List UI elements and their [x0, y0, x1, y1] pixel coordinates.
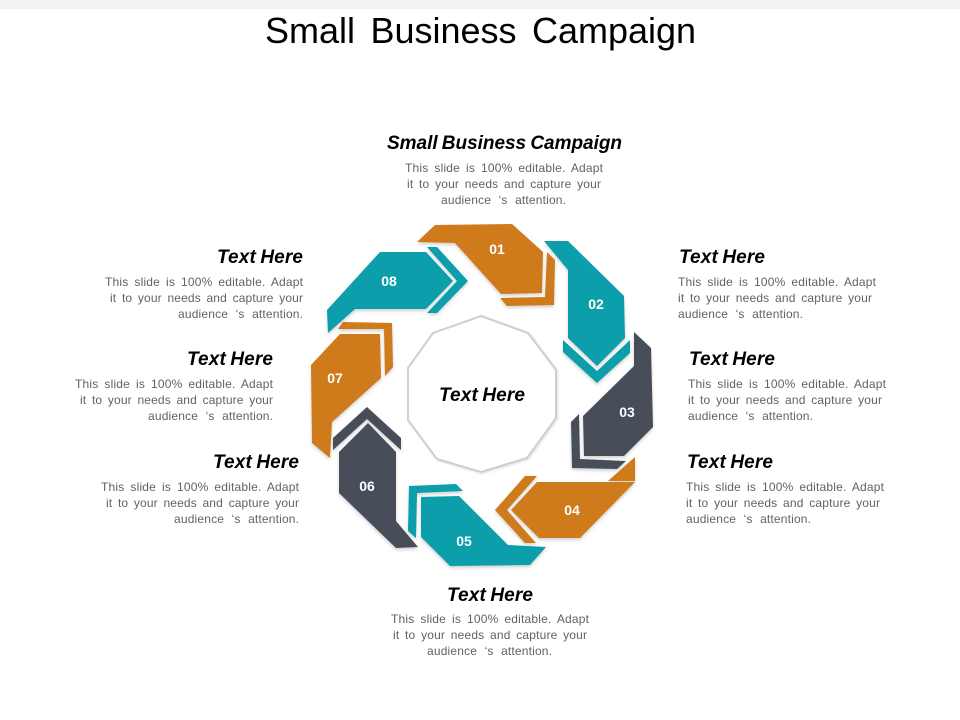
text block: top: audience ‘s attention.: [441, 193, 566, 207]
arrow segment 04: [495, 457, 635, 543]
text block: lower left: This slide is 100% editable. Adapt: [101, 480, 300, 494]
text block: bottom: This slide is 100% editable. Adapt: [391, 612, 590, 626]
text block: middle right: Text Here: [689, 349, 775, 370]
text block: upper left: Text Here: [217, 247, 303, 268]
text block: middle left: Text Here: [187, 349, 273, 370]
text block: middle right: [688, 349, 887, 423]
text block: middle left: This slide is 100% editable. Adapt: [75, 377, 274, 391]
arrow segment 02: [544, 241, 630, 383]
text block: lower left: Text Here: [213, 452, 299, 473]
arrow segment 07: [311, 322, 393, 458]
text block: upper right: [678, 247, 877, 321]
arrow segment 05: [408, 484, 546, 566]
text block: lower right: Text Here: [687, 452, 773, 473]
central decagon: [408, 316, 556, 472]
text block: middle right: it to your needs and capture your: [688, 393, 882, 407]
arrow segment 06: 06: [359, 478, 375, 494]
title: Small Business Campaign: [265, 10, 696, 51]
text block: upper right: Text Here: [679, 247, 765, 268]
text block: upper left: audience ‘s attention.: [178, 307, 303, 321]
arrow segment 06: [333, 407, 418, 548]
text block: top: it to your needs and capture your: [407, 177, 601, 191]
text block: upper right: This slide is 100% editable. Adapt: [678, 275, 877, 289]
arrow segment 05: 05: [456, 533, 472, 549]
text block: top: This slide is 100% editable. Adapt: [405, 161, 604, 175]
text block: top: Small Business Campaign: [387, 133, 622, 154]
text block: upper right: it to your needs and capture your: [678, 291, 872, 305]
arrow segment 01: 01: [489, 241, 505, 257]
text block: upper left: it to your needs and capture your: [110, 291, 303, 305]
arrow segment 01: [417, 224, 555, 306]
arrow segment 07: 07: [327, 370, 343, 386]
text block: lower right: audience ‘s attention.: [686, 512, 811, 526]
text block: bottom: [391, 585, 590, 658]
text block: lower left: audience ‘s attention.: [174, 512, 299, 526]
arrow segment 03: [571, 332, 653, 469]
text block: top: [387, 133, 622, 207]
text block: middle left: [75, 349, 274, 423]
text block: middle right: This slide is 100% editable. Adapt: [688, 377, 887, 391]
text block: lower left: [101, 452, 300, 526]
center label: Text Here: [439, 385, 525, 406]
text block: middle right: audience ‘s attention.: [688, 409, 813, 423]
arrow segment 08: 08: [381, 273, 397, 289]
text block: lower right: it to your needs and capture your: [686, 496, 880, 510]
text block: middle left: audience ‘s attention.: [148, 409, 273, 423]
arrow segment 02: 02: [588, 296, 604, 312]
text block: upper left: [105, 247, 304, 321]
text block: bottom: audience ‘s attention.: [427, 644, 552, 658]
text block: lower right: [686, 452, 885, 526]
text block: bottom: Text Here: [447, 585, 533, 606]
arrow segment 08: [327, 247, 468, 333]
arrow segment 03: 03: [619, 404, 635, 420]
text block: bottom: it to your needs and capture your: [393, 628, 587, 642]
text block: upper left: This slide is 100% editable. Adapt: [105, 275, 304, 289]
arrow segment 04: 04: [564, 502, 580, 518]
text block: middle left: it to your needs and capture your: [80, 393, 273, 407]
text block: lower left: it to your needs and capture your: [106, 496, 299, 510]
text block: lower right: This slide is 100% editable. Adapt: [686, 480, 885, 494]
text block: upper right: audience ‘s attention.: [678, 307, 803, 321]
